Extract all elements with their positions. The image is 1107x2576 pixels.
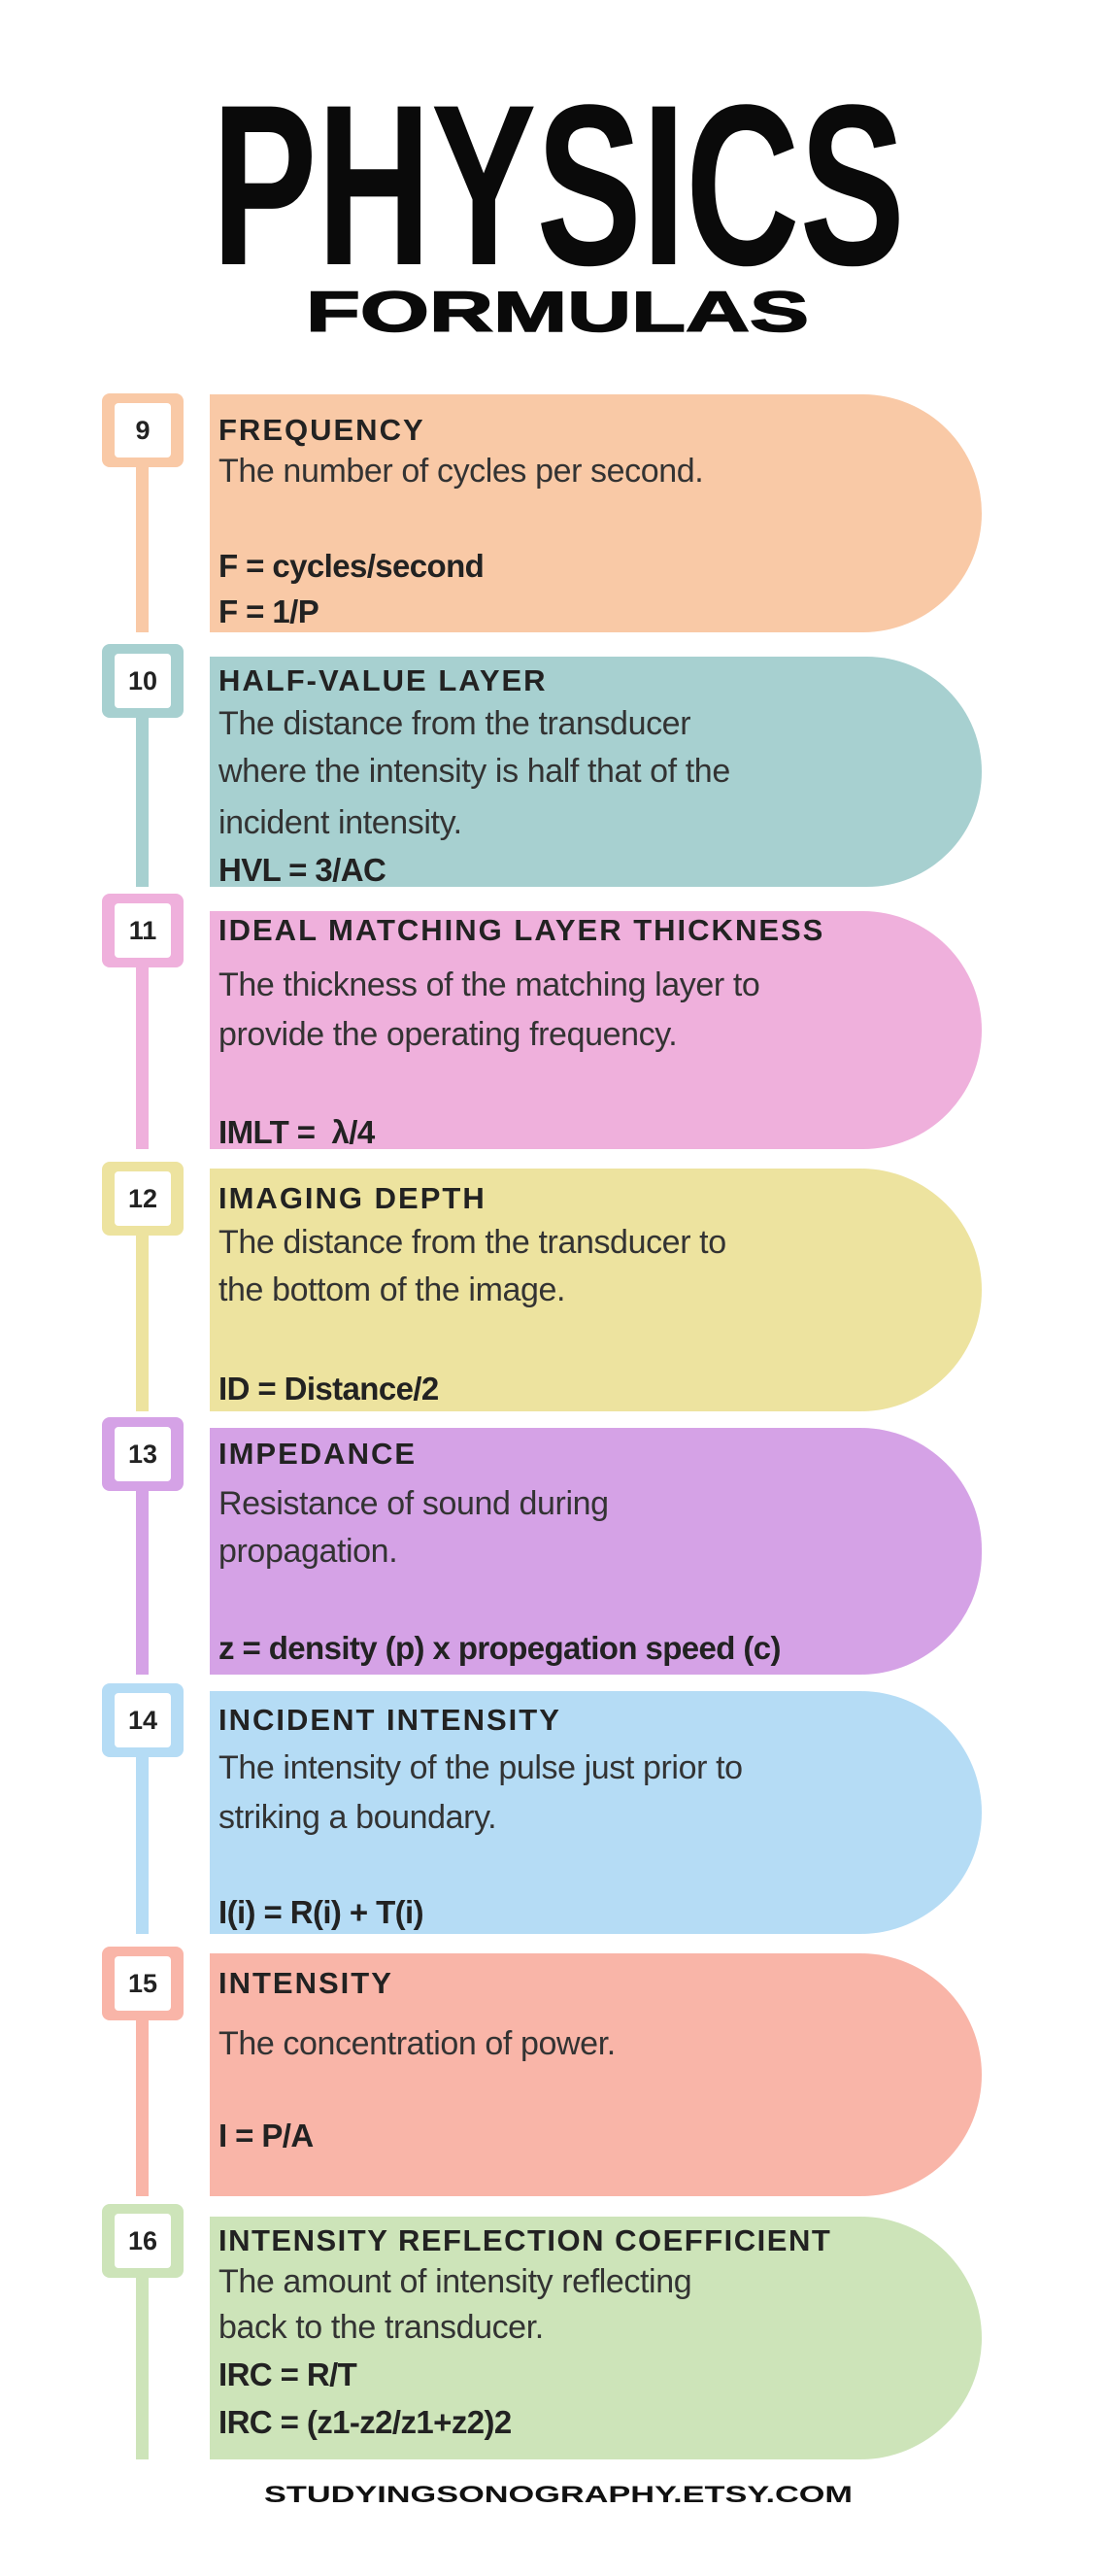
badge 11	[102, 894, 184, 967]
panel: 10 half-value layer: where the intensity is half that of the	[218, 753, 730, 790]
badge 10	[102, 644, 184, 718]
panel: 14 incident intensity: The intensity of the pulse just prior to	[218, 1749, 743, 1786]
panel: 13 impedance	[102, 1417, 982, 1675]
panel: 14 incident intensity	[102, 1683, 982, 1934]
badge 14	[102, 1683, 184, 1757]
heading: half-value layer: HALF-VALUE LAYER	[218, 663, 548, 697]
badge 12	[102, 1162, 184, 1236]
panel: 16 intensity reflection coefficient: The amount of intensity reflecting	[218, 2263, 691, 2300]
panel: 11 ideal matching layer thickness: IMLT = λ/4	[218, 1114, 375, 1150]
panel: 12 imaging depth: the bottom of the image.	[218, 1271, 565, 1308]
badge 10: 10	[128, 666, 157, 695]
badge 11: 11	[129, 916, 156, 945]
heading: impedance: IMPEDANCE	[218, 1437, 417, 1471]
badge 15: 15	[128, 1969, 157, 1998]
badge 16: 16	[128, 2226, 157, 2255]
badge 14: 14	[128, 1706, 157, 1735]
badge 16	[102, 2204, 184, 2278]
title: FORMULAS	[306, 281, 809, 344]
badge 9	[102, 393, 184, 467]
panel: 13 impedance: Resistance of sound during	[218, 1485, 609, 1522]
panel: 12 imaging depth: The distance from the transducer to	[218, 1224, 726, 1261]
badge 15	[102, 1947, 184, 2020]
panel: 11 ideal matching layer thickness: The thickness of the matching layer to	[218, 966, 759, 1003]
badge 9: 9	[135, 416, 151, 445]
badge 12: 12	[128, 1184, 157, 1213]
panel: 10 half-value layer	[102, 644, 982, 888]
heading: incident intensity: INCIDENT INTENSITY	[218, 1703, 561, 1737]
panel: 12 imaging depth	[102, 1162, 982, 1411]
panel: 14 incident intensity: striking a boundary.	[218, 1799, 496, 1836]
panel: 10 half-value layer: HVL = 3/AC	[218, 852, 386, 888]
panel: 16 intensity reflection coefficient: IRC = (z1-z2/z1+z2)2	[218, 2404, 512, 2440]
panel: 10 half-value layer: incident intensity.	[218, 804, 462, 841]
heading: frequency: FREQUENCY	[218, 413, 425, 447]
panel: 14 incident intensity: I(i) = R(i) + T(i)	[218, 1894, 423, 1930]
panel: 9 frequency: F = 1/P	[218, 593, 319, 629]
panel: 9 frequency: The number of cycles per second.	[218, 453, 703, 490]
panel: 12 imaging depth: ID = Distance/2	[218, 1371, 439, 1407]
heading: intensity: INTENSITY	[218, 1966, 393, 2000]
heading: IRC: INTENSITY REFLECTION COEFFICIENT	[218, 2223, 831, 2257]
panel: 13 impedance: propagation.	[218, 1533, 397, 1570]
panel: 16 intensity reflection coefficient: back to the transducer.	[218, 2309, 544, 2346]
panel: 10 half-value layer: The distance from the transducer	[218, 705, 690, 742]
panel: 16 intensity reflection coefficient: IRC = R/T	[218, 2356, 356, 2392]
panel: 9 frequency: F = cycles/second	[218, 548, 484, 584]
panel: 11 ideal matching layer thickness	[102, 894, 982, 1150]
panel: 15 intensity: I = P/A	[218, 2118, 314, 2153]
badge 13	[102, 1417, 184, 1491]
footer: STUDYINGSONOGRAPHY.ETSY.COM	[264, 2482, 853, 2508]
heading: imaging depth: IMAGING DEPTH	[218, 1181, 486, 1215]
panel: 9 frequency	[102, 393, 982, 632]
panel: 11 ideal matching layer thickness: provide the operating frequency.	[218, 1016, 677, 1053]
badge 13: 13	[128, 1440, 157, 1469]
panel: 13 impedance: z = density (p) x propegation speed (c)	[218, 1630, 781, 1666]
panel: 15 intensity: The concentration of power.	[218, 2025, 616, 2062]
heading: IMLT: IDEAL MATCHING LAYER THICKNESS	[218, 913, 824, 947]
